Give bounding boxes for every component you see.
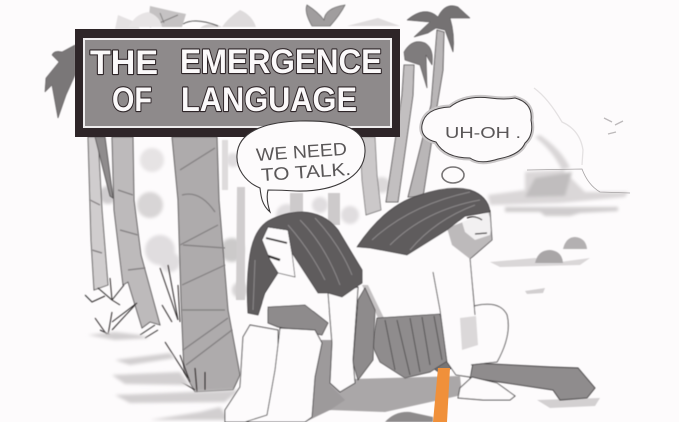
man club handle: [425, 357, 452, 373]
sign inner border: [83, 38, 392, 128]
sign title: THE: [90, 44, 158, 82]
orange bar: [433, 368, 450, 422]
man grass skirt: [372, 314, 452, 378]
woman eyes and mouth: [266, 238, 287, 243]
sign board: [75, 29, 400, 137]
woman skirt side: [353, 288, 375, 380]
background foliage wash: [99, 148, 390, 298]
palm fronds top: [407, 6, 470, 52]
thought bubble trail: [442, 167, 464, 183]
man back shadow: [362, 285, 384, 318]
volcano outline and birds: [527, 88, 630, 193]
sign title: EMERGENCE: [180, 43, 382, 81]
right palm trees: [386, 6, 470, 202]
speech bubble: we need to talk: TO TALK.: [260, 159, 352, 185]
thought bubble: uh-oh: [422, 97, 532, 183]
sign title: [90, 43, 382, 119]
woman hair: [247, 212, 362, 315]
man figure: [355, 188, 595, 400]
woman arm: [328, 287, 358, 392]
woman near leg: [225, 325, 278, 422]
foreground grass and shrubs: [85, 265, 205, 392]
ground wash shadows left: [88, 332, 240, 420]
tree bark marks: [90, 148, 232, 365]
palm trunk back: [408, 30, 444, 197]
man hair: [357, 188, 490, 255]
woman skirt on lap: [268, 305, 328, 335]
man arm: [433, 245, 475, 377]
stone ground under figures: [316, 376, 462, 422]
ground rocks and shadows right: [490, 237, 600, 408]
woman face: [260, 227, 295, 277]
sign title: LANGUAGE: [181, 81, 357, 119]
palm fronds lower: [404, 42, 432, 88]
tree trunk middle: [112, 137, 160, 328]
foliage above sign: [115, 5, 400, 29]
background trees behind figures: [222, 137, 381, 300]
man club: [470, 363, 595, 400]
speech bubble: we need to talk: WE NEED: [255, 139, 348, 165]
background volcano and smoke: [488, 135, 628, 216]
large foreground tree trunk: [172, 137, 240, 392]
tree trunk far left: [88, 137, 108, 290]
gap shadow behind legs: [300, 340, 345, 422]
man far leg: [470, 304, 508, 365]
speech bubble: we need to talk: [237, 121, 365, 212]
left palm behind sign: [45, 45, 75, 118]
palm tree trunks behind left: [88, 137, 240, 392]
thought bubble: uh-oh: UH-OH .: [445, 125, 521, 142]
palm trunk front: [386, 65, 414, 202]
sign title: OF: [112, 81, 152, 119]
woman figure: [225, 212, 375, 422]
man foot: [458, 377, 515, 400]
sign grey panel: [85, 40, 390, 126]
man face and beard: [447, 212, 492, 259]
man torso: [355, 205, 475, 320]
sign dark frame: [75, 29, 400, 137]
woman torso: [262, 253, 360, 310]
dark diagonal trunk: [95, 137, 113, 198]
woman far leg: [245, 328, 322, 422]
